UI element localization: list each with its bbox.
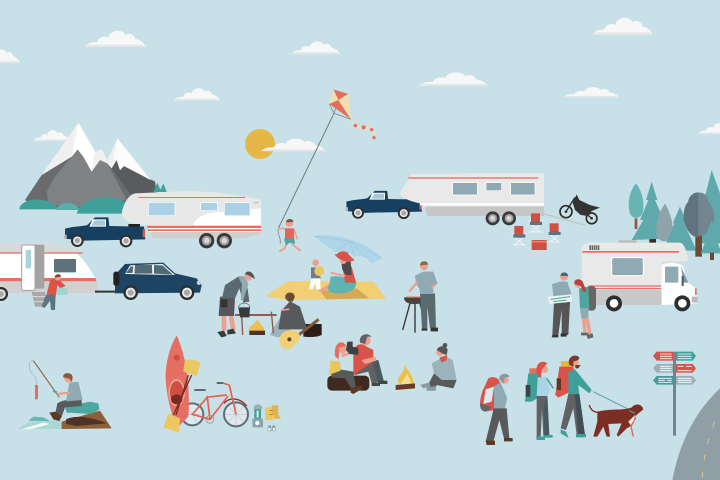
picnic blanket [265, 281, 386, 300]
cooking over campfire [217, 271, 277, 337]
motorhome RV [582, 240, 698, 311]
sun with cloud [245, 129, 326, 159]
ramp [544, 214, 585, 225]
road [672, 388, 720, 480]
campfire [396, 365, 415, 390]
mountain [19, 123, 167, 214]
pickup truck [345, 191, 422, 219]
motorbike [560, 194, 600, 224]
hiker with teal backpack [525, 362, 553, 440]
woman and child on blanket [309, 251, 356, 293]
large fifth wheel trailer [399, 173, 544, 225]
kayak and paddle [163, 336, 201, 433]
hiker walking dog [555, 356, 633, 438]
signpost [653, 352, 696, 436]
clouds [0, 18, 720, 141]
campers on log [327, 334, 387, 394]
dog [589, 405, 643, 437]
seated woman [420, 343, 457, 391]
hiker with red backpack frame [480, 374, 513, 445]
beach umbrella [313, 235, 382, 263]
camp chairs and cooler [511, 213, 563, 250]
blue car [113, 263, 202, 300]
hiking boots [265, 405, 281, 420]
fisherman on rock [17, 361, 112, 429]
trees [629, 170, 720, 260]
guitarist [270, 292, 322, 349]
bicycle [181, 382, 248, 426]
boy flying kite [278, 219, 301, 251]
travel trailer with person and steps [0, 243, 117, 310]
fifth wheel trailer with pickup [64, 191, 261, 248]
couple with map [548, 272, 596, 339]
lantern [252, 404, 263, 427]
binoculars [267, 425, 276, 431]
kite with string [278, 89, 376, 228]
man grilling [403, 261, 438, 333]
